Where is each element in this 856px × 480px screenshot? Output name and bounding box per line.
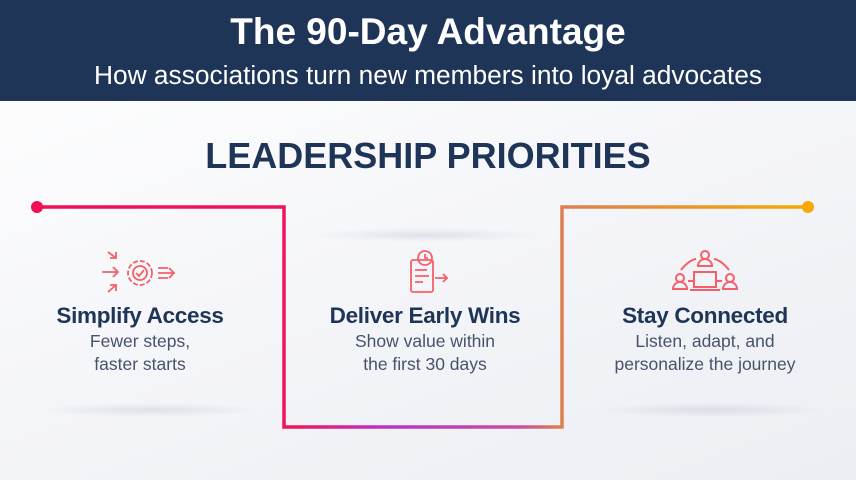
card: stay connected <box>615 250 796 374</box>
card: stay connected: personalize the journey <box>615 354 795 374</box>
card: deliver early wins: Show value within <box>355 331 495 351</box>
icon: document gear <box>410 250 448 293</box>
subtitle: How associations turn new members into loyal advocates <box>94 60 762 90</box>
card: simplify access: Fewer steps, <box>90 331 190 351</box>
header band <box>0 0 856 101</box>
card: deliver early wins <box>330 250 520 374</box>
title: The 90-Day Advantage <box>230 11 626 52</box>
card: simplify access: faster starts <box>94 354 186 374</box>
card: deliver early wins: Deliver Early Wins <box>330 303 520 328</box>
icon: gear arrows <box>102 251 176 293</box>
icon: network people <box>672 250 738 291</box>
card: simplify access: Simplify Access <box>56 303 224 328</box>
section heading: LEADERSHIP PRIORITIES <box>205 135 651 176</box>
card: stay connected: Stay Connected <box>622 303 788 328</box>
card: simplify access <box>56 251 224 374</box>
card: deliver early wins: the first 30 days <box>363 354 487 374</box>
card: stay connected: Listen, adapt, and <box>635 331 775 351</box>
